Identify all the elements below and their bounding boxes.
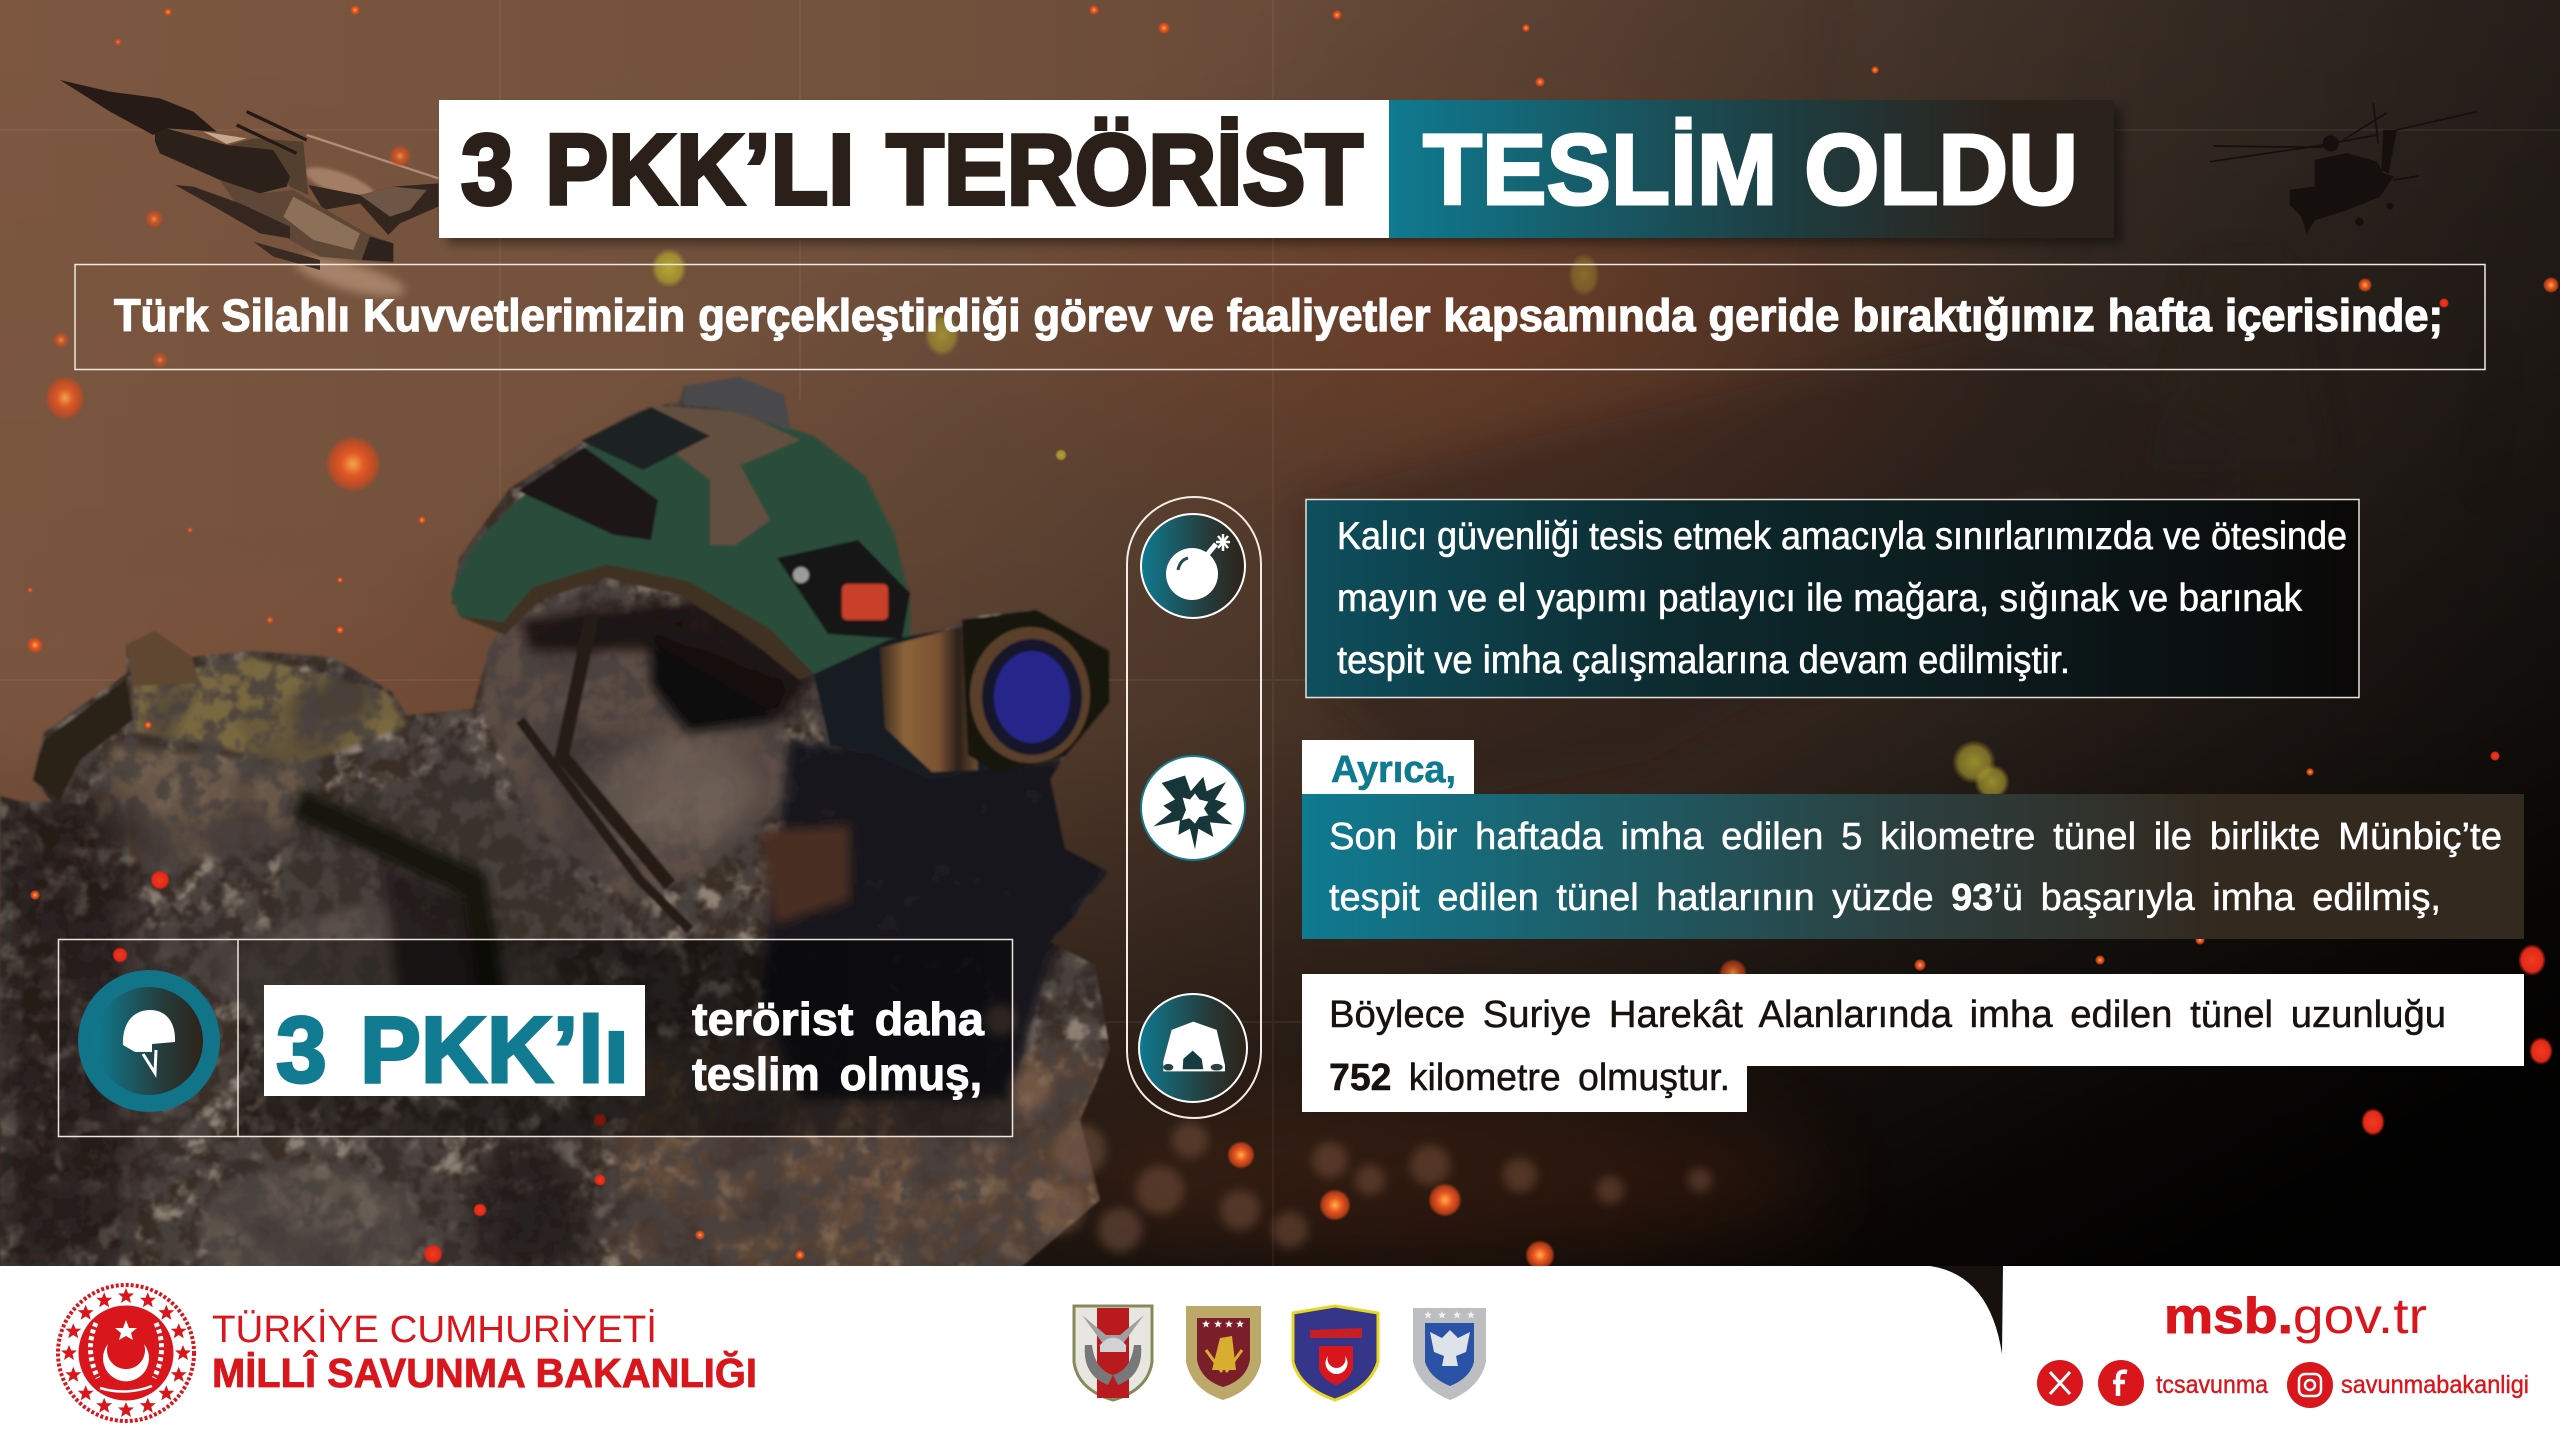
panel: mine and explosive text: tespit ve imha çalışmalarına devam edilmiştir. <box>1337 639 2070 682</box>
emblem: general staff <box>1074 1306 1152 1400</box>
icon: helicopter <box>2210 103 2477 233</box>
logo: ministry emblem <box>58 1285 194 1421</box>
footer <box>0 1266 2560 1440</box>
title: teal part: TESLİM OLDU <box>1423 114 2078 226</box>
icon: explosion <box>1141 756 1245 860</box>
panel: mine and explosive text <box>1306 500 2359 698</box>
shoulder and arm <box>210 904 556 1023</box>
footer title: MİLLÎ SAVUNMA BAKANLIĞI <box>212 1350 757 1396</box>
emblem: land forces <box>1186 1306 1261 1400</box>
icon: cave <box>1139 994 1247 1102</box>
band text <box>1302 794 2524 939</box>
emblem: air forces <box>1413 1308 1486 1400</box>
panel: mine and explosive text: mayın ve el yapımı patlayıcı ile mağara, sığınak ve barınak <box>1337 577 2302 620</box>
social: instagram <box>2287 1362 2333 1408</box>
website: msb.gov.tr <box>2164 1288 2427 1344</box>
icon: helmet <box>78 970 220 1112</box>
label: 3 PKK'lı: 3 PKK’lı <box>276 997 629 1102</box>
panel: tunnel stats teal <box>1302 740 2524 939</box>
background: faint tank and tower silhouette <box>1300 0 2500 800</box>
bokeh lights <box>984 1004 1712 1252</box>
social handle: tcsavunma: tcsavunma <box>2156 1371 2268 1399</box>
footer title: TÜRKİYE CUMHURİYETİ <box>212 1308 657 1351</box>
stat text: terörist daha <box>692 993 984 1045</box>
warm glow behind the lower sparks <box>1070 1100 1830 1260</box>
footer title <box>212 1308 757 1396</box>
panel: icon capsule <box>1127 497 1261 1118</box>
stat text <box>692 993 984 1100</box>
social: facebook <box>2098 1360 2144 1406</box>
band text: tespit edilen tünel hatlarının yüzde 93’ü başarıyla imha edilmiş, <box>1329 877 2441 919</box>
panel: tunnel total white: 752 kilometre olmuştur. <box>1329 1057 1730 1099</box>
panel: mine and explosive text: Kalıcı güvenliği tesis etmek amacıyla sınırlarımızda ve ötesinde <box>1337 515 2347 558</box>
rifle scope <box>814 625 990 780</box>
backpack <box>133 657 407 767</box>
panel: tunnel total white: Böylece Suriye Harekât Alanlarında imha edilen tünel uzunluğu <box>1329 994 2446 1036</box>
icon: bomb <box>1141 514 1245 618</box>
social: X <box>2037 1360 2083 1406</box>
icon: fighter jet <box>60 80 438 304</box>
label: Ayrıca: Ayrıca, <box>1331 749 1456 791</box>
title: white part: 3 PKK’LI TERÖRİST <box>461 114 1363 226</box>
social handle: savunmabakanligi: savunmabakanligi <box>2341 1371 2529 1399</box>
subtitle box <box>75 264 2485 370</box>
label: Ayrıca <box>1302 740 1474 794</box>
subtitle box: Türk Silahlı Kuvvetlerimizin gerçekleştirdiği görev ve faaliyetler kapsamında geride bıraktığımız hafta içerisinde; <box>114 290 2443 341</box>
soldier figure <box>0 376 1110 1266</box>
panel: tunnel total white <box>1302 974 2524 1112</box>
face mask <box>481 610 791 901</box>
rifle dark mass <box>760 740 1109 1100</box>
panel: 3 PKK'lı stat <box>58 940 1013 1136</box>
helmet <box>451 412 910 674</box>
band text: Son bir haftada imha edilen 5 kilometre tünel ile birlikte Münbiç’te <box>1329 816 2502 858</box>
stat text: teslim olmuş, <box>692 1048 982 1100</box>
title <box>439 100 2122 244</box>
emblem: naval forces <box>1293 1306 1378 1400</box>
